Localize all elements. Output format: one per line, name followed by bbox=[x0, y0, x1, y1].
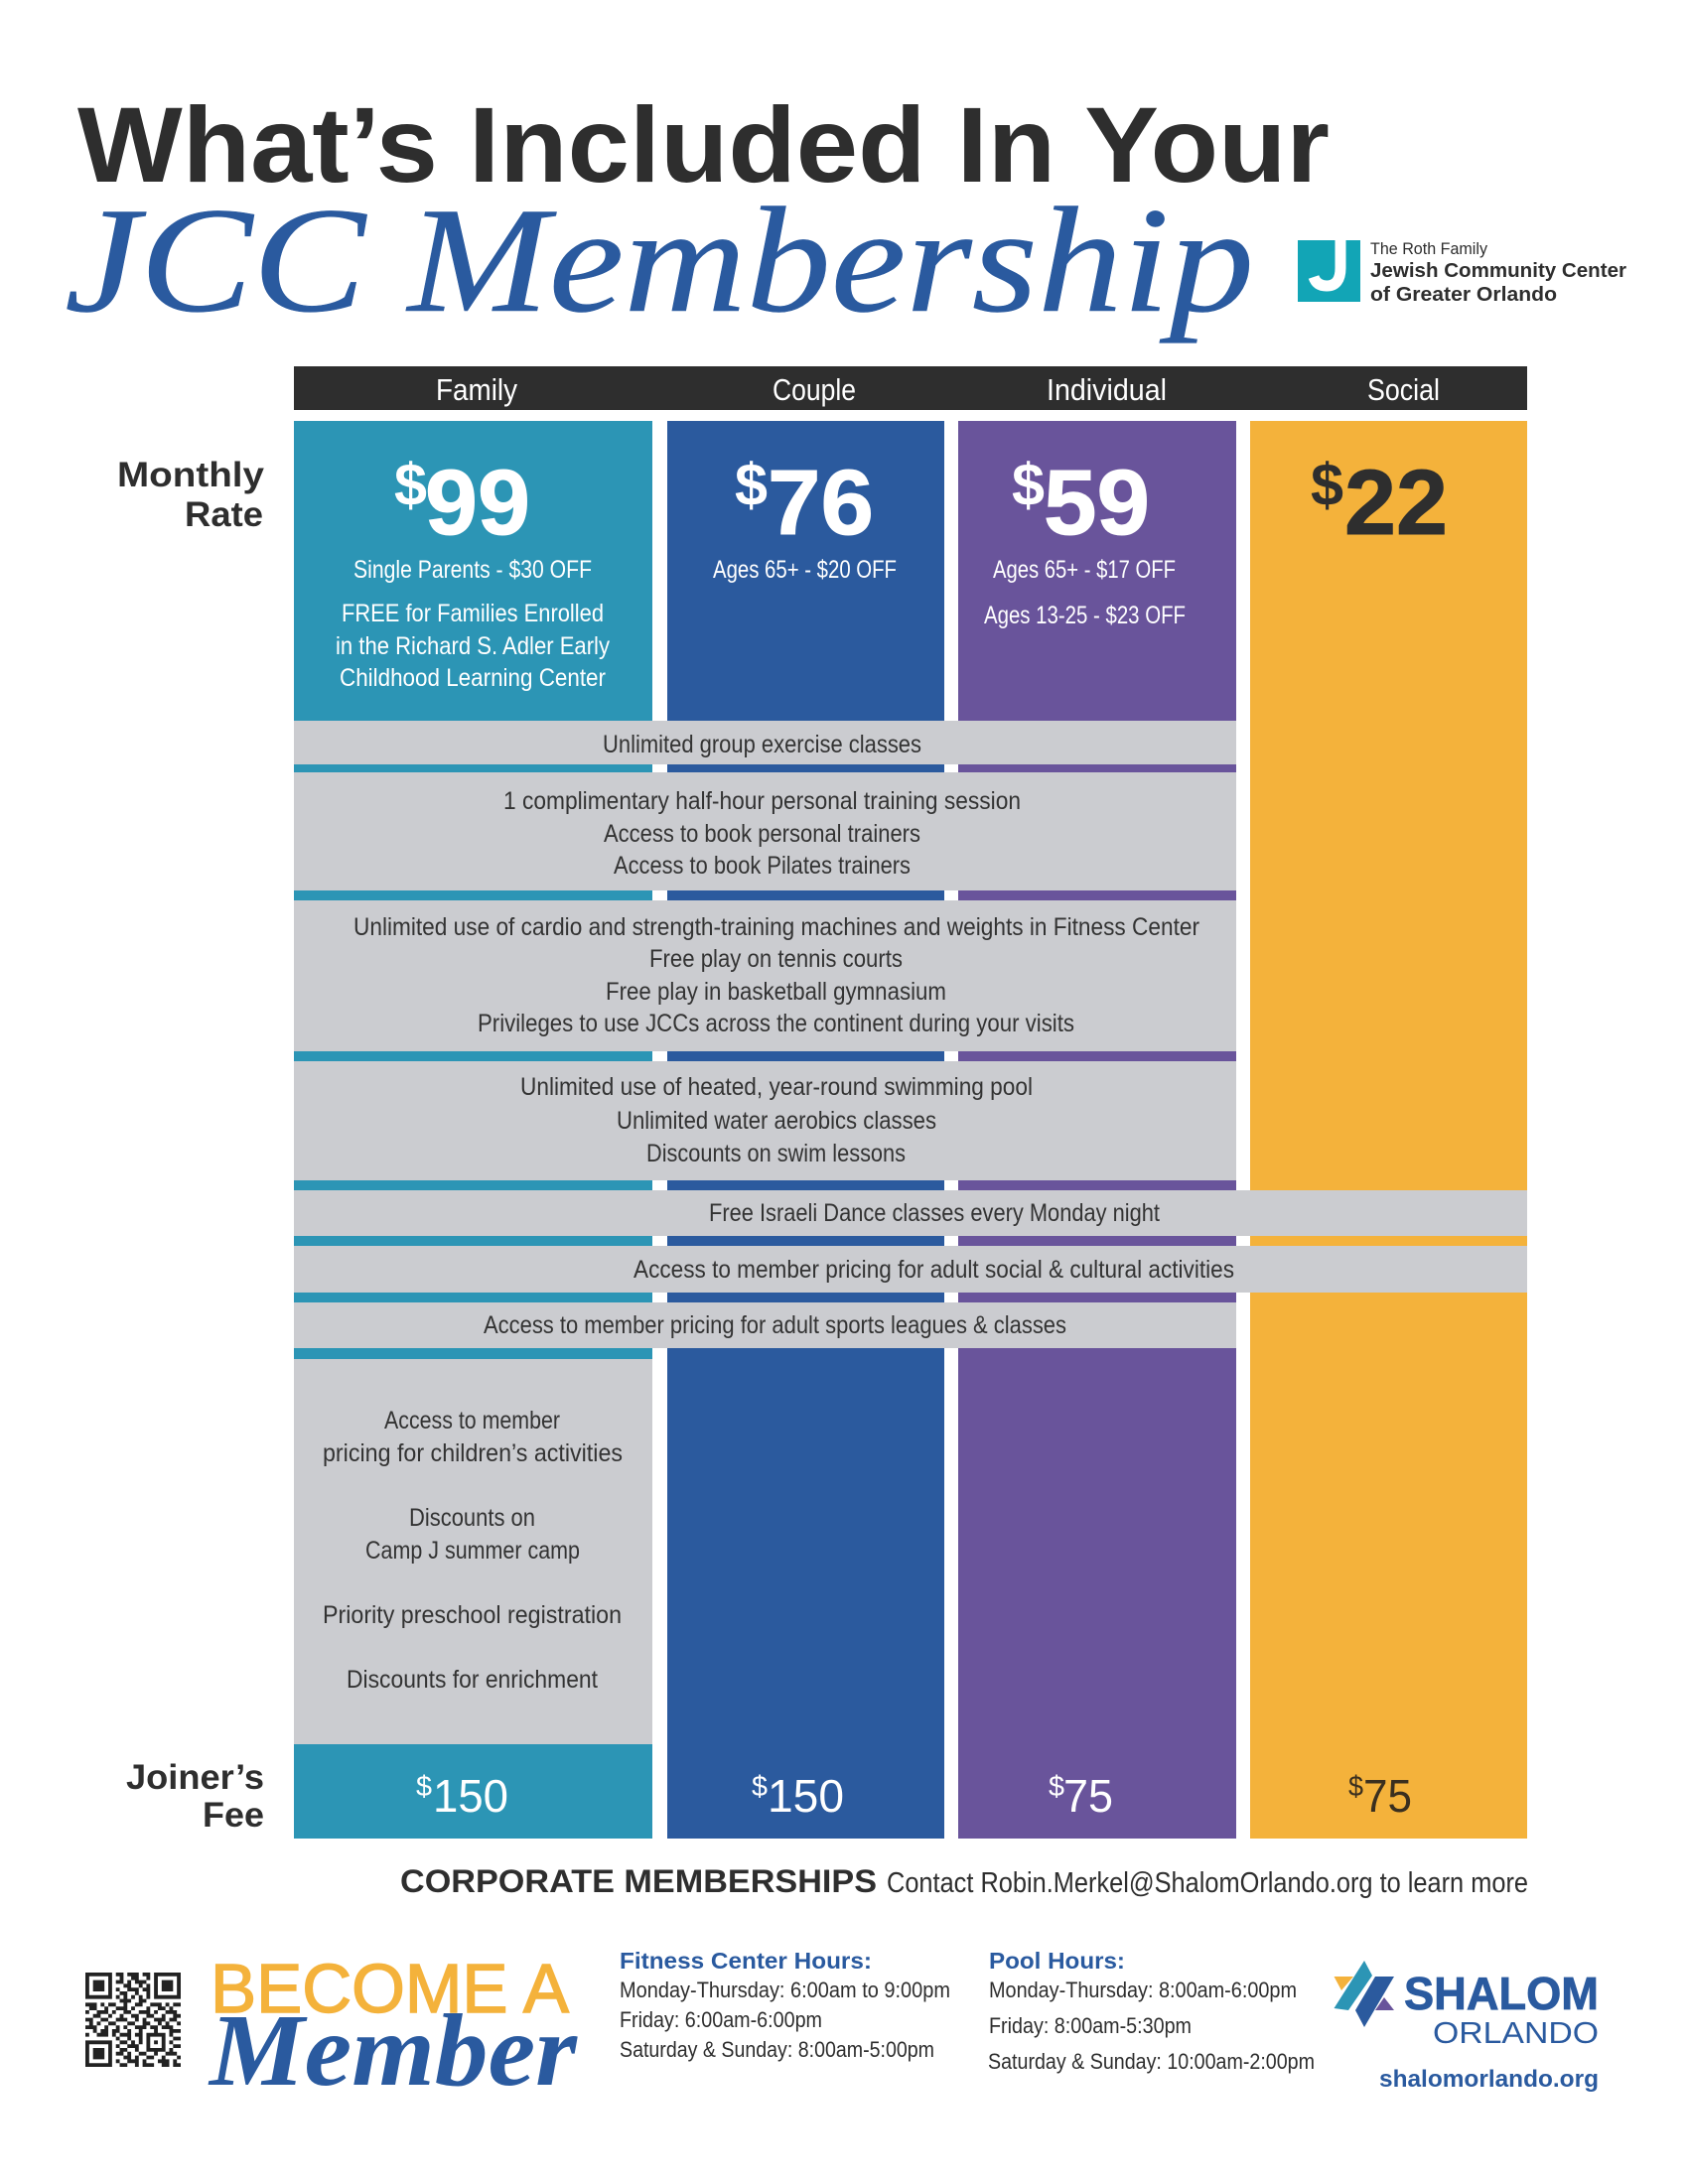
family joiner fee: $ bbox=[416, 1771, 432, 1803]
benefit panel: family only: Discounts for enrichment bbox=[347, 1666, 598, 1694]
individual joiner fee: 75 bbox=[1063, 1770, 1113, 1822]
fitness center hours: Fitness Center Hours: bbox=[620, 1948, 872, 1974]
couple price: 76 bbox=[768, 451, 874, 554]
logo text: of Greater Orlando bbox=[1370, 284, 1557, 306]
column header bar: Individual bbox=[1047, 372, 1167, 407]
benefit row: swimming pool bbox=[294, 1061, 1236, 1180]
logo wordmark bbox=[1379, 1968, 1599, 2093]
column header bar bbox=[294, 366, 1527, 410]
benefit panel: family only: Discounts on bbox=[409, 1504, 535, 1532]
benefit row: fitness center bbox=[294, 900, 1236, 1051]
panel: social column bbox=[1250, 421, 1527, 1839]
family joiner fee: 150 bbox=[433, 1770, 508, 1822]
family discounts bbox=[336, 556, 610, 692]
corporate memberships line bbox=[400, 1863, 1528, 1899]
benefit panel: family only bbox=[294, 1359, 652, 1744]
individual discounts bbox=[984, 556, 1186, 629]
become a member heading: Member bbox=[208, 1993, 579, 2108]
icon: star bbox=[1335, 1961, 1394, 2027]
row label: monthly rate: Rate bbox=[185, 495, 263, 534]
logo: Jewish Community Center bbox=[1298, 239, 1626, 306]
benefit panel: family only: Camp J summer camp bbox=[365, 1537, 580, 1565]
column header bar: Couple bbox=[773, 372, 856, 407]
individual discounts: Ages 13-25 - $23 OFF bbox=[984, 602, 1186, 629]
social joiner fee: $ bbox=[1348, 1771, 1363, 1803]
fitness center hours: Friday: 6:00am-6:00pm bbox=[620, 2007, 822, 2032]
pool hours: Pool Hours: bbox=[989, 1948, 1125, 1974]
benefit row: sports leagues bbox=[294, 1302, 1236, 1348]
icon: J square bbox=[1298, 240, 1360, 302]
column header bar: Social bbox=[1367, 372, 1440, 407]
individual joiner fee: $ bbox=[1049, 1771, 1064, 1803]
benefit row: personal training bbox=[294, 772, 1236, 890]
benefit row: swimming pool: Unlimited water aerobics classes bbox=[617, 1107, 936, 1135]
fitness center hours bbox=[620, 1948, 950, 2062]
benefit row: personal training: 1 complimentary half-hour personal training session bbox=[503, 787, 1021, 815]
title script line: JCC Membership bbox=[65, 177, 1254, 343]
logo wordmark: shalomorlando.org bbox=[1379, 2066, 1599, 2093]
benefit row: fitness center: Free play in basketball gymnasium bbox=[606, 978, 946, 1006]
benefit row: fitness center: Privileges to use JCCs across the continent during your visits bbox=[478, 1010, 1074, 1037]
family price: $ bbox=[394, 452, 427, 518]
individual discounts: Ages 65+ - $17 OFF bbox=[993, 556, 1176, 584]
family price: 99 bbox=[425, 451, 530, 554]
benefit row: fitness center: Unlimited use of cardio and strength-training machines and weights in Fitness Center bbox=[353, 913, 1199, 941]
pool hours: Friday: 8:00am-5:30pm bbox=[989, 2013, 1192, 2038]
title line one: What’s Included In Your bbox=[77, 84, 1330, 205]
social price: $ bbox=[1311, 452, 1343, 518]
benefit panel: family only: pricing for children’s activities bbox=[323, 1439, 623, 1467]
benefit row: personal training: Access to book personal trainers bbox=[604, 820, 920, 848]
benefit row: fitness center: Free play on tennis courts bbox=[649, 945, 903, 973]
benefit row: personal training: Access to book Pilates trainers bbox=[614, 852, 911, 880]
pool hours: Monday-Thursday: 8:00am-6:00pm bbox=[989, 1978, 1297, 2002]
individual price: $ bbox=[1012, 452, 1045, 518]
couple joiner fee: $ bbox=[752, 1771, 768, 1803]
family discounts: in the Richard S. Adler Early bbox=[336, 632, 610, 660]
social price: 22 bbox=[1344, 451, 1448, 554]
benefit panel: family only: Priority preschool registration bbox=[323, 1601, 622, 1629]
corporate memberships line: CORPORATE MEMBERSHIPS bbox=[400, 1863, 877, 1899]
logo text bbox=[1370, 239, 1626, 306]
benefit row: swimming pool: Discounts on swim lessons bbox=[646, 1140, 906, 1167]
benefit row: group exercise: Unlimited group exercise classes bbox=[603, 731, 921, 758]
benefit row: social and cultural: Access to member pricing for adult social & cultural activities bbox=[633, 1256, 1234, 1284]
title bbox=[65, 84, 1330, 343]
couple joiner fee: 150 bbox=[768, 1770, 844, 1822]
panel: family column bbox=[294, 421, 652, 1839]
logo text: Jewish Community Center bbox=[1370, 260, 1626, 282]
logo wordmark: ORLANDO bbox=[1433, 2015, 1599, 2050]
benefit row: swimming pool: Unlimited use of heated, year-round swimming pool bbox=[520, 1073, 1033, 1101]
corporate memberships line: Contact Robin.Merkel@ShalomOrlando.org to learn more bbox=[887, 1867, 1528, 1899]
family discounts: FREE for Families Enrolled bbox=[342, 600, 604, 627]
benefit row: israeli dance: Free Israeli Dance classes every Monday night bbox=[709, 1199, 1160, 1227]
benefit row: group exercise bbox=[294, 721, 1236, 764]
logo: Shalom Orlando bbox=[1335, 1961, 1599, 2093]
row label: monthly rate: Monthly bbox=[117, 456, 265, 494]
logo text: The Roth Family bbox=[1370, 239, 1487, 258]
couple discount: Ages 65+ - $20 OFF bbox=[713, 556, 897, 584]
benefit row: sports leagues: Access to member pricing for adult sports leagues & classes bbox=[484, 1311, 1066, 1339]
benefit row: israeli dance bbox=[294, 1190, 1527, 1236]
individual price: 59 bbox=[1044, 451, 1150, 554]
become a member heading: BECOME A bbox=[211, 1950, 569, 2027]
family discounts: Childhood Learning Center bbox=[340, 664, 606, 692]
social joiner fee: 75 bbox=[1363, 1770, 1412, 1822]
row label: joiner's fee: Joiner’s bbox=[126, 1758, 264, 1797]
column header bar: Family bbox=[436, 372, 517, 407]
couple price: $ bbox=[735, 452, 768, 518]
family discounts: Single Parents - $30 OFF bbox=[353, 556, 592, 584]
panel: individual column bbox=[958, 421, 1236, 1839]
pool hours: Saturday & Sunday: 10:00am-2:00pm bbox=[988, 2049, 1315, 2074]
pool hours bbox=[988, 1948, 1315, 2074]
row label: joiner's fee: Fee bbox=[203, 1796, 264, 1835]
benefit panel: family only: Access to member bbox=[384, 1407, 560, 1434]
fitness center hours: Monday-Thursday: 6:00am to 9:00pm bbox=[620, 1978, 950, 2002]
row label: joiner's fee bbox=[126, 1758, 264, 1835]
logo wordmark: SHALOM bbox=[1404, 1968, 1599, 2019]
panel: couple column bbox=[667, 421, 944, 1839]
become a member heading bbox=[208, 1950, 579, 2108]
row label: monthly rate bbox=[117, 456, 265, 534]
benefit row: social and cultural bbox=[294, 1246, 1527, 1293]
fitness center hours: Saturday & Sunday: 8:00am-5:00pm bbox=[620, 2037, 934, 2062]
icon: qr code bbox=[85, 1975, 181, 2065]
